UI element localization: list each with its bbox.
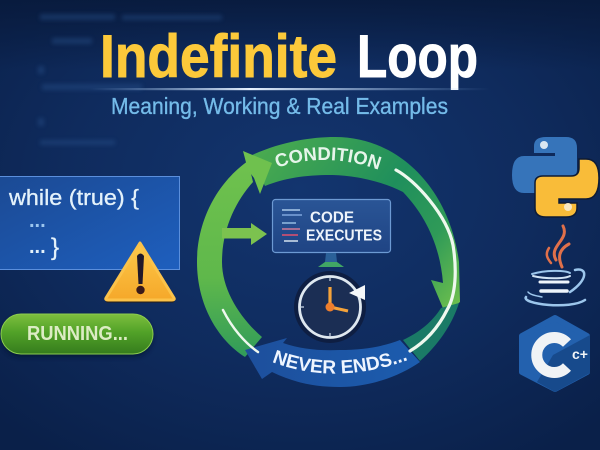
title: Loop: [357, 23, 478, 90]
badge: running: RUNNING...: [27, 323, 128, 345]
highlight strokes: [223, 170, 455, 352]
label: code executes: CODE: [310, 210, 354, 226]
icon: code lines: [282, 210, 302, 241]
arc: lower right segment: [403, 303, 459, 361]
arrow: never ends arc: [245, 338, 420, 387]
code text: while (true) {: [8, 185, 139, 210]
panel: code executes: [272, 200, 390, 252]
label: condition: CONDITION: [276, 147, 382, 170]
badge: running: [1, 314, 153, 357]
arrow: left green arc: [197, 151, 272, 357]
code text: ...: [29, 210, 46, 232]
icon: clock: [294, 271, 366, 343]
diagram: loop ring: [197, 137, 460, 387]
blurred code backdrop: [38, 14, 222, 145]
icon: c++ logo: [522, 318, 590, 392]
java cup: [526, 270, 585, 305]
icon: c++ logo: c+: [572, 346, 588, 362]
panel: while code block: [0, 176, 180, 270]
title: Indefinite: [100, 23, 337, 90]
icon: warning triangle: [106, 243, 174, 302]
code text: ...: [29, 236, 46, 258]
connector stand: [318, 253, 344, 267]
code text: [8, 185, 139, 261]
label: code executes: EXECUTES: [306, 228, 382, 244]
java steam: [547, 226, 569, 267]
icon: python logo: [512, 137, 599, 217]
subtitle: Meaning, Working & Real Examples: [111, 93, 448, 119]
title rule: [90, 88, 490, 90]
code text: }: [51, 234, 59, 261]
arrow: into code box: [222, 223, 267, 245]
icon: java logo: [526, 226, 585, 305]
arrow: condition arc: [250, 137, 460, 313]
label: never ends: NEVER ENDS...: [273, 350, 407, 374]
label: code executes: [306, 210, 382, 244]
